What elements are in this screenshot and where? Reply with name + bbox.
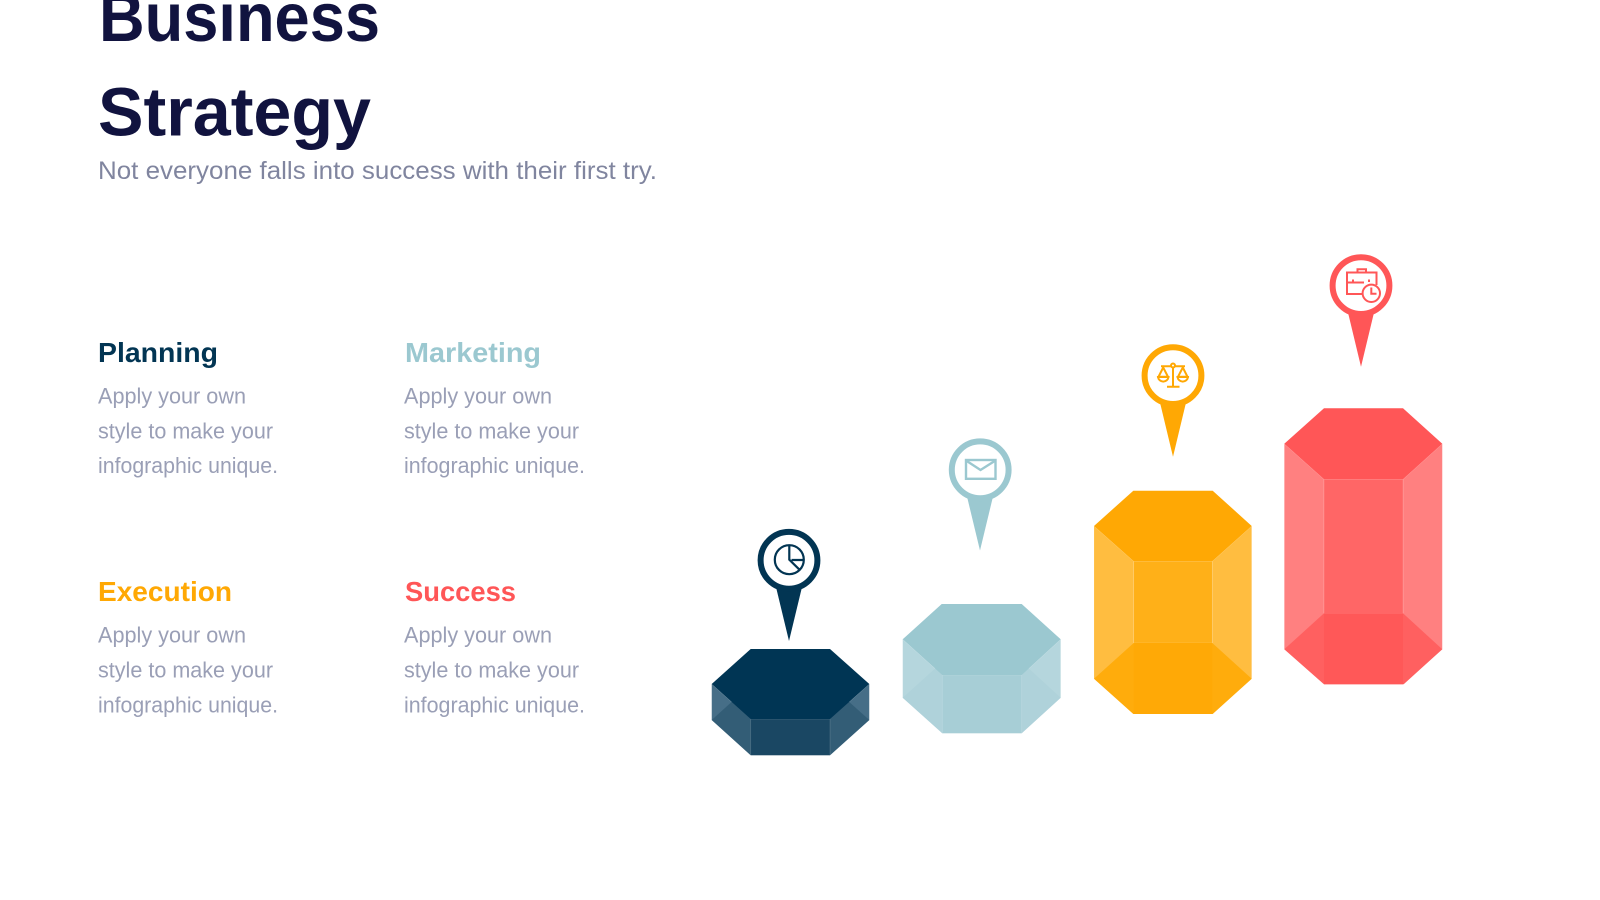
body: Marketing: infographic unique. [404,453,585,478]
title: Strategy [98,74,371,150]
prism: Success [1284,408,1442,684]
pin: Success (briefcase and clock icon) [1333,257,1389,367]
body: Marketing [404,384,585,478]
body: Marketing: style to make your [404,418,579,444]
icon: briefcase with clock [1347,269,1380,302]
pin: Planning (pie chart icon) [761,532,817,641]
body: Success: style to make your [404,658,579,682]
body: Execution: style to make your [98,658,273,682]
body: Marketing: Apply your own [404,384,552,408]
body: Success [404,622,585,718]
heading: Marketing: Marketing [405,337,541,368]
body: Execution [98,622,278,718]
heading: Success: Success [405,576,516,607]
pin: Execution (scales icon) [1145,347,1201,457]
body: Planning: infographic unique. [98,453,278,478]
body: Planning [98,384,278,478]
prism: Planning [712,649,869,755]
prism: Marketing [903,604,1061,733]
icon: envelope [966,460,996,479]
text block: Execution [98,576,278,718]
subtitle: Not everyone falls into success with their first try. [98,157,657,185]
body: Execution: Apply your own [98,622,246,648]
body: Planning: style to make your [98,418,273,444]
icon: pie chart [775,545,804,574]
body: Success: Apply your own [404,622,552,648]
body: Execution: infographic unique. [98,692,278,718]
icon: balance scales [1158,364,1188,387]
prism: Execution [1094,491,1252,714]
heading: Execution: Execution [98,576,232,607]
body: Planning: Apply your own [98,384,246,408]
text block: Success [404,576,585,718]
title [98,0,380,150]
heading: Planning: Planning [98,337,218,368]
pin: Marketing (envelope icon) [952,441,1009,550]
body: Success: infographic unique. [404,692,585,718]
text block: Planning [98,337,278,478]
text block: Marketing [404,337,585,478]
